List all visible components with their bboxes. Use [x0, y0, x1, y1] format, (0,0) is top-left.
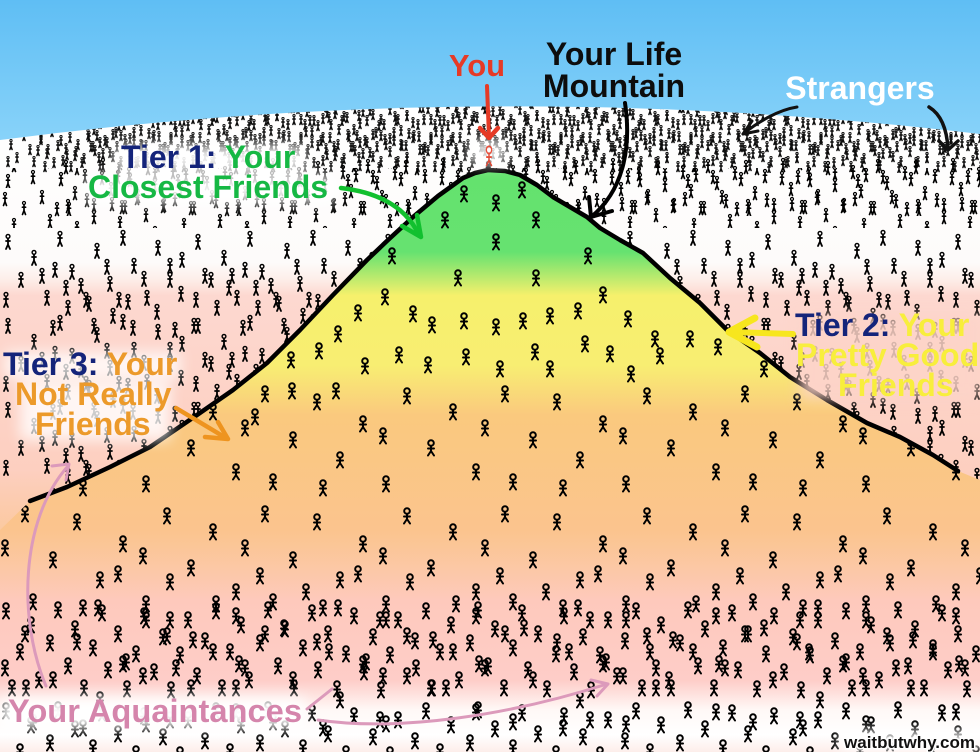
mountain fill: green, yellow and orange tiers — [0, 170, 980, 600]
figures on the mountain: close and pretty good friends — [252, 182, 767, 424]
label: Tier 1 Your Closest Friends: Closest Friends — [88, 169, 328, 205]
label: Tier 2 Your Pretty Good Friends: Pretty Good — [796, 337, 979, 373]
label: Tier 3 Your Not Really Friends: Your — [107, 346, 177, 382]
credit: waitbutwhy.com: waitbutwhy.com — [843, 733, 975, 752]
label: You: You — [449, 48, 505, 83]
label: Tier 2 Your Pretty Good Friends: Tier 2: — [795, 307, 899, 343]
arrow: tier 1 — [341, 188, 421, 237]
label: Your Life Mountain: Your Life — [546, 36, 682, 72]
label: Your Life Mountain: Mountain — [543, 68, 685, 104]
mountain outline — [30, 170, 958, 501]
label: Tier 2 Your Pretty Good Friends: Friends — [838, 367, 954, 403]
arrow: tier 3 — [176, 408, 228, 439]
crowd of strangers behind the mountain — [0, 84, 980, 508]
crowd of acquaintances and not-really friends on the lower slopes — [0, 380, 980, 752]
arrow: strangers left — [743, 107, 797, 134]
arrow: you pointer — [480, 86, 498, 138]
label: Tier 1 Your Closest Friends: Tier 1: — [121, 139, 225, 175]
sky background — [0, 0, 980, 150]
arrow: tier 2 — [729, 318, 793, 347]
label: Your Aquaintances: Your Aquaintances — [8, 693, 302, 729]
arrows: aquaintances pointers — [28, 464, 608, 724]
label: Tier 2 Your Pretty Good Friends: Your — [899, 307, 969, 343]
arrow: strangers right — [929, 107, 958, 150]
label: Tier 3 Your Not Really Friends: Friends — [35, 406, 151, 442]
label: Tier 3 Your Not Really Friends: Not Really — [15, 376, 172, 412]
label: Tier 1 Your Closest Friends: Your — [225, 139, 295, 175]
arrow: life mountain pointer — [589, 103, 627, 217]
label: Strangers: Strangers — [785, 70, 935, 106]
you: red figure on the summit — [486, 146, 492, 166]
label: Tier 3 Your Not Really Friends: Tier 3: — [3, 346, 107, 382]
